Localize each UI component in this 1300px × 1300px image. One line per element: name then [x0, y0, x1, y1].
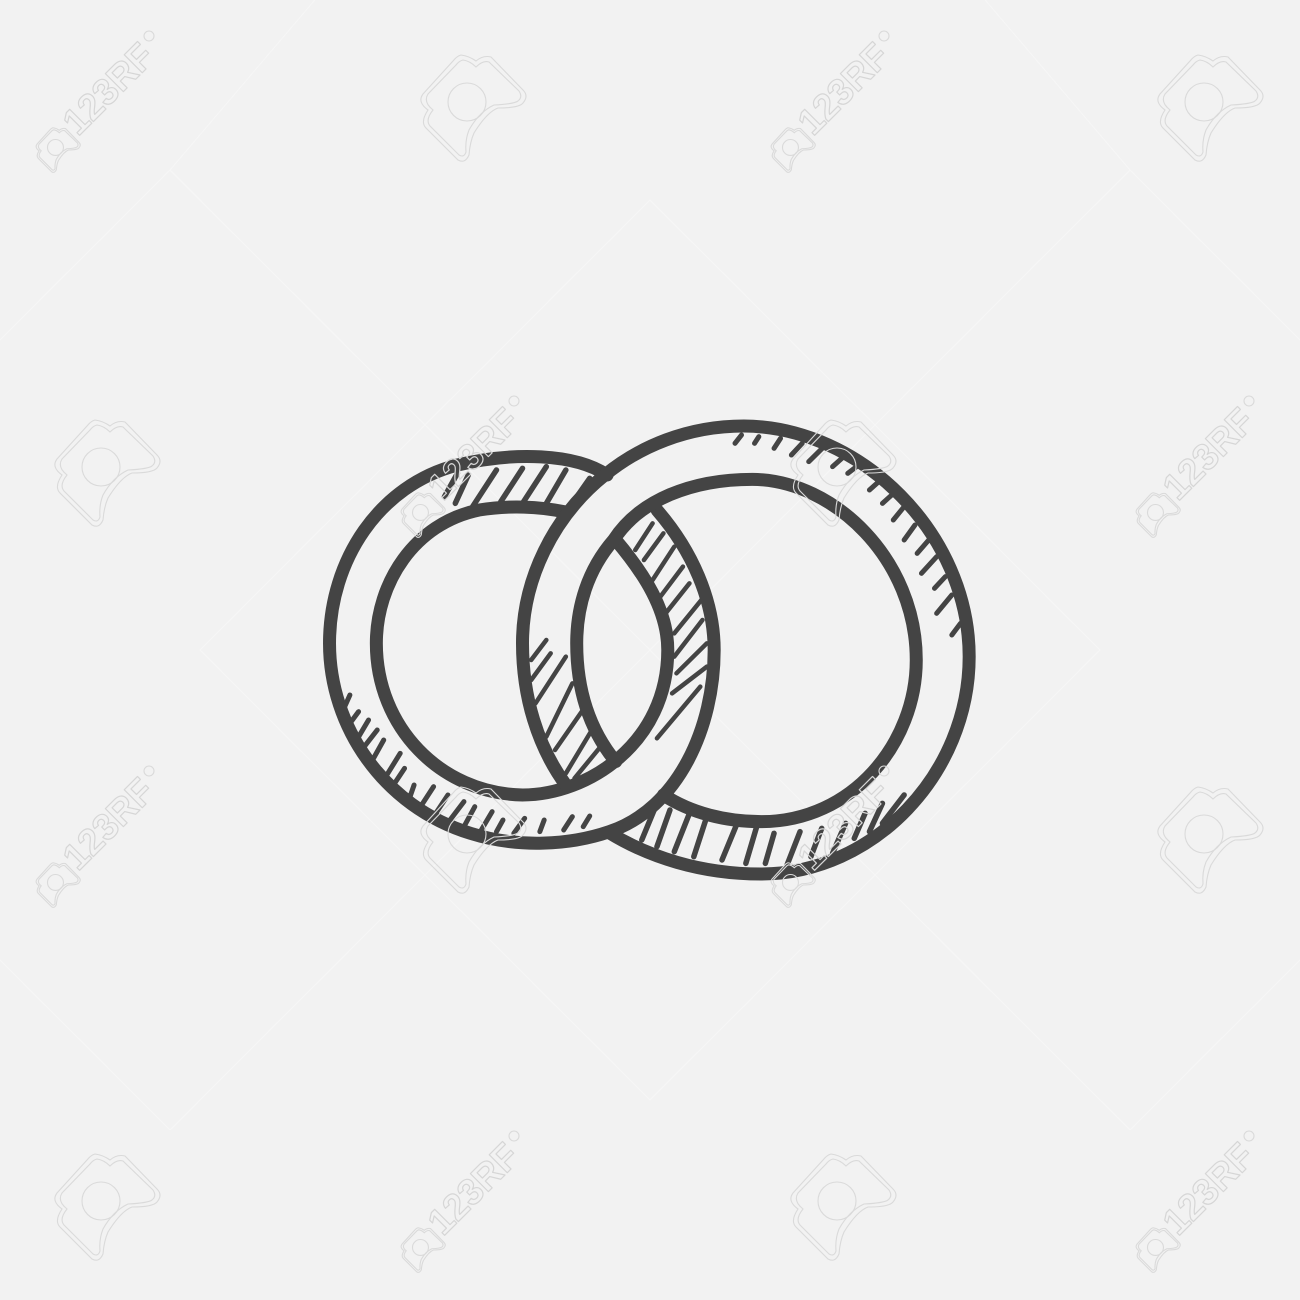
hatching: bottom of right ring — [624, 795, 904, 865]
watermark: 123RF top left: 123RF — [55, 35, 162, 143]
watermark: 123RF third row left — [36, 766, 162, 907]
watermark: 123RF second row right: 123RF — [1155, 400, 1262, 508]
watermark: 123RF top centre — [771, 31, 897, 172]
watermark: 123RF bottom right — [1136, 1131, 1262, 1272]
watermark: logo mark second row centre — [791, 420, 896, 526]
watermark: logo mark bottom centre — [791, 1154, 896, 1260]
watermark: 123RF bottom centre: 123RF — [420, 1135, 527, 1243]
watermark: 123RF top centre: 123RF — [790, 35, 897, 143]
watermark: logo mark third row centre-left — [421, 787, 526, 893]
watermark: 123RF bottom centre — [401, 1131, 527, 1272]
icon: interlocking wedding rings — [330, 426, 969, 874]
watermark: 123RF bottom right: 123RF — [1155, 1135, 1262, 1243]
watermark: 123RF third row left: 123RF — [55, 770, 162, 878]
watermark: 123RF third row centre: 123RF — [790, 770, 897, 878]
hatching: top of left ring — [444, 467, 590, 507]
right ring outlines — [522, 426, 969, 874]
watermark: 123RF second row centre: 123RF — [420, 400, 527, 508]
watermark: logo mark bottom left — [55, 1154, 160, 1260]
watermark: logo mark top centre-left — [421, 55, 526, 161]
hatching: right lens — [635, 523, 707, 738]
watermark: 123RF second row centre — [401, 396, 527, 537]
hatching: left lens — [531, 640, 607, 778]
watermark: 123RF third row centre — [771, 766, 897, 907]
watermark: logo mark top right — [1158, 55, 1263, 161]
watermark: 123RF second row right — [1136, 396, 1262, 537]
watermark: logo mark third row right — [1158, 787, 1263, 893]
hatching: top right of right ring — [735, 435, 961, 635]
watermark: 123RF top left — [36, 31, 162, 172]
left ring outlines — [330, 457, 714, 843]
hatching: bottom left of left ring — [345, 695, 590, 833]
watermark: logo mark second row left — [55, 420, 160, 526]
